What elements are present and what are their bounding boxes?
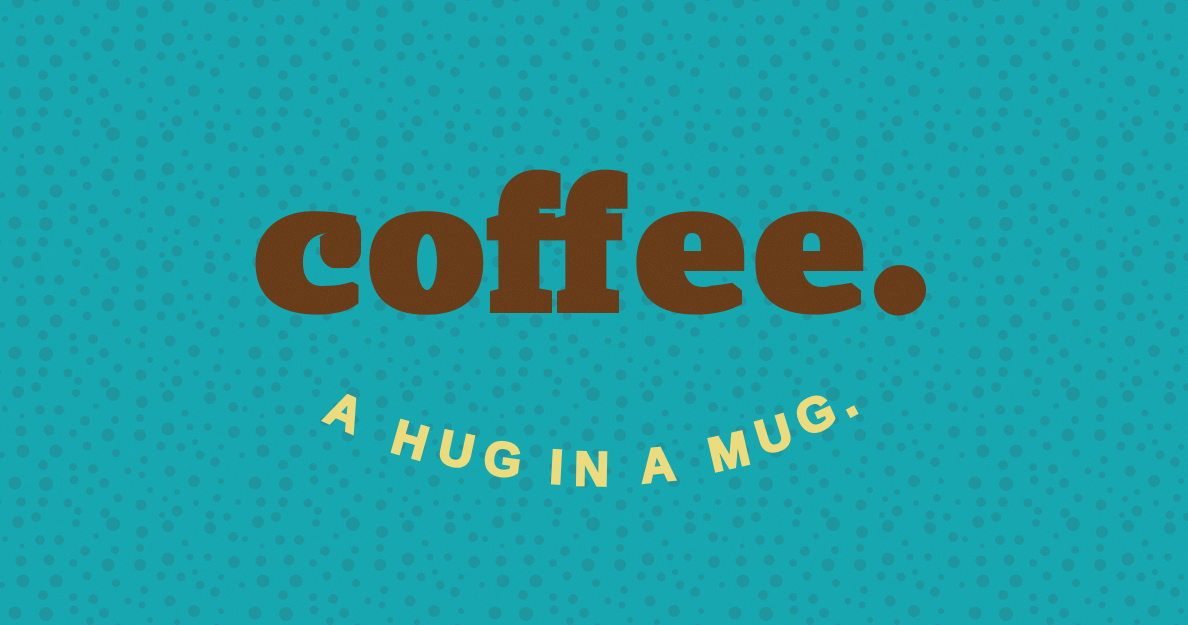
- title: coffee.: f: [561, 145, 617, 343]
- title: coffee.: .: [876, 145, 920, 343]
- title: coffee.: o: [372, 145, 481, 343]
- tagline: curved text: A HUG IN A MUG.: [318, 375, 865, 497]
- title: coffee.: [256, 145, 920, 343]
- title: coffee.: e: [759, 145, 858, 343]
- title: coffee.: c: [259, 145, 353, 343]
- title: coffee.: f: [494, 145, 550, 343]
- title: coffee.: e: [640, 145, 739, 343]
